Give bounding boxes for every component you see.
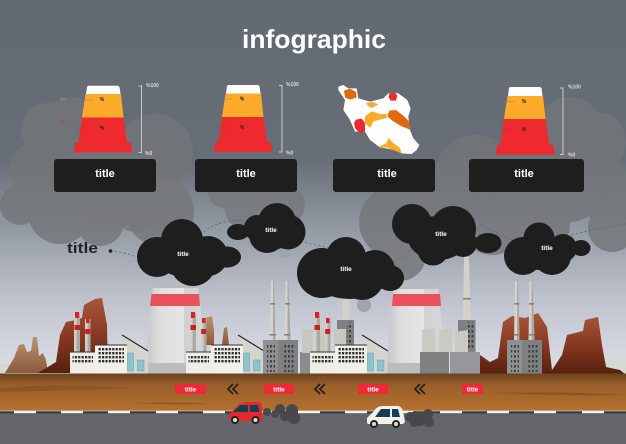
smoke cloud 3 [297,237,404,300]
cone chart 4: % [522,99,527,105]
cooling tower right [386,286,447,374]
map of Iran [338,85,419,154]
title box 1 [54,159,156,192]
middle tan rocks [203,316,229,345]
side title with dot: title [67,240,98,257]
smoke cloud 2 [227,203,306,253]
grey smoke: middle cluster [82,172,305,233]
right power block [420,257,480,374]
cone chart 4: %100 [568,84,581,90]
arrow chevrons 1 [228,384,238,394]
red label 3 [358,384,388,394]
exhaust smoke from white car [405,409,434,427]
cone chart 4: %0 [568,152,575,158]
smoke cloud 5: title [541,245,553,252]
grey chimneys and building left [263,281,298,374]
title box 2: title [236,168,256,180]
pale smoke wisps under clouds [278,246,371,312]
smoke cloud 3: title [340,266,352,273]
road [0,410,626,444]
cone chart 2: %0 [286,150,293,156]
left red rocks [38,298,108,373]
cone chart 2: %100 [286,82,299,88]
cone chart 4: % [522,127,527,133]
cone chart 1: % [100,126,105,132]
red label 4 [462,384,483,394]
title: infographic [242,24,386,54]
cone chart 2: % [240,125,245,131]
smoke cloud 1: title [177,251,189,258]
cone chart 1: %0 [145,151,152,157]
red label 4: title [467,386,479,394]
title box 3: title [377,168,397,180]
grey smoke: left cluster [0,97,194,246]
grey smoke: right cluster [359,97,626,281]
title box 2 [195,159,297,192]
exhaust smoke from red car [263,404,300,424]
ground [0,374,626,412]
factory group 3 [310,312,388,374]
title box 1: title [95,168,115,180]
smoke cloud 4: title [435,231,447,238]
red label 2 [264,384,294,394]
arrow chevrons 3 [415,384,425,394]
red car [229,402,263,424]
factory group 2 [186,312,264,374]
smoke cloud 1 [137,219,241,286]
side title with dot [67,240,112,257]
central power block [300,290,354,374]
cooling tower left [144,285,208,374]
red label 1: title [185,386,197,394]
arrow chevrons 2 [315,384,325,394]
white car [367,406,405,428]
title box 3 [333,159,435,192]
smoke cloud 4 [392,204,502,266]
grey chimneys and building right [507,281,542,374]
smoke cloud 5 [504,222,590,275]
red label 3: title [367,386,379,394]
title box 4 [469,159,584,192]
cone chart 1 [59,83,159,157]
dashed connector lines [110,220,626,265]
distant hills [0,358,626,374]
factory group 1 [70,312,148,374]
red label 2: title [273,386,285,394]
cone chart 1: title [59,120,65,124]
smoke cloud 2: title [265,227,277,234]
cone chart 2: % [240,96,245,102]
cone chart 1: title [60,97,66,101]
cone chart 2 [214,82,299,156]
right red rocks [480,313,625,374]
cone chart 4 [496,84,581,158]
left tan rocks [5,337,48,373]
cone chart 1: % [100,97,105,103]
title box 4: title [514,168,534,180]
red label 1 [175,384,206,394]
cone chart 1: %100 [146,83,159,89]
